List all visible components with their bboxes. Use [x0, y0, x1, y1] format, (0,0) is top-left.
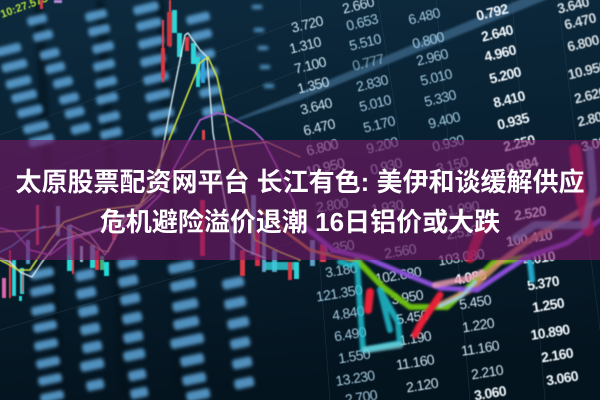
- table figures, bottom right: 1.930: [370, 196, 405, 217]
- table figures, bottom right: 100.410: [505, 226, 554, 250]
- table figures, bottom right: 1.350: [321, 236, 356, 257]
- table figures, top right: 1.310: [288, 33, 323, 57]
- table figures, top right: 2.830: [355, 71, 390, 95]
- table figures, top right: 0.984: [505, 153, 540, 177]
- table figures, top right: 0.935: [496, 109, 531, 133]
- table figures, bottom right: 1.090: [446, 197, 481, 218]
- table figures, bottom right: 2.210: [470, 361, 505, 382]
- table figures, top right: 2.640: [480, 21, 515, 45]
- title: 危机避险溢价退潮 16日铝价或大跌: [100, 207, 500, 237]
- table figures, top right: 5.200: [488, 63, 523, 87]
- table figures, bottom right: 1.220: [461, 314, 496, 335]
- table figures, bottom right: 4.080: [453, 266, 488, 287]
- table figures, bottom right: 1.190: [398, 327, 433, 348]
- table figures, bottom right: 4.840: [331, 302, 366, 323]
- table figures, bottom right: 1.550: [337, 345, 372, 366]
- table figures, top right: 7.100: [293, 53, 328, 77]
- top candlesticks: [161, 0, 205, 87]
- table figures, top right: 1.350: [296, 73, 331, 97]
- lower columns: [29, 267, 55, 280]
- line charts: white, yellow, purple, orange: [0, 33, 360, 277]
- table figures, top right: 6.470: [302, 115, 337, 139]
- table figures, top right: 3.640: [299, 94, 334, 118]
- table figures, top right: 5.170: [362, 112, 397, 136]
- table figures, top right: 0.653: [345, 10, 380, 34]
- table figures, top right: 6.480: [407, 4, 442, 28]
- table figures, top right: 0.930: [431, 131, 466, 155]
- table figures, top right: 5.510: [348, 30, 383, 54]
- table figures, top right: 3.150: [435, 153, 470, 177]
- table figures, bottom right: 1.250: [531, 294, 566, 315]
- table figures, top right: 0.777: [351, 50, 386, 74]
- table figures, bottom right: 102.680: [374, 263, 423, 287]
- table figures, top right: 9.400: [427, 108, 462, 132]
- table figures, top right: 2.250: [502, 131, 537, 155]
- table figures, bottom right: 10.890: [529, 321, 571, 343]
- table figures, bottom right: 121.350: [315, 281, 364, 305]
- table figures, bottom right: 2.120: [405, 374, 440, 395]
- table figures, top right: 5.330: [423, 86, 458, 110]
- table figures, bottom right: 13.230: [334, 367, 376, 389]
- table figures, top right: 10.950: [304, 154, 347, 180]
- table figures, bottom right: 2.560: [383, 240, 418, 261]
- table figures, bottom right: 5.450: [458, 291, 493, 312]
- table figures, bottom right: 4.010: [522, 247, 557, 268]
- table figures, bottom right: 103.080: [437, 245, 486, 269]
- table figures, bottom right: 6.490: [333, 323, 368, 344]
- table figures, bottom right: 5.450: [395, 306, 430, 327]
- table figures, top right: 9.200: [365, 133, 400, 157]
- table figures, top right: 5.010: [358, 91, 393, 115]
- table figures, bottom right: 2.520: [513, 202, 548, 223]
- title: [15, 167, 585, 237]
- table figures, bottom right: 11.160: [460, 337, 501, 359]
- table figures, top right: 6.800: [566, 31, 600, 55]
- table figures, top right: 0.792: [475, 0, 510, 24]
- table figures, top right: [288, 0, 600, 180]
- table figures, top right: 0.800: [411, 28, 446, 52]
- table figures, bottom right: 3.060: [545, 367, 580, 388]
- table figures, bottom right: 5.370: [526, 272, 561, 293]
- lower-left candlesticks: [2, 130, 326, 301]
- table figures, top right: 2.960: [415, 45, 450, 69]
- highlighted table row: [215, 0, 560, 128]
- table figures, top right: 4.960: [483, 41, 518, 65]
- table figures, bottom right: 3.180: [324, 259, 359, 280]
- blurred left columns of figures: [0, 1, 274, 400]
- table figures, bottom right: 2.160: [540, 344, 575, 365]
- table figures, top right: 6.800: [305, 135, 340, 159]
- table figures, top right: 3.720: [290, 12, 325, 36]
- table figures, bottom right: 3.950: [390, 286, 425, 307]
- table figures, bottom right: 11.160: [395, 351, 436, 373]
- translucent purple title band: [0, 140, 600, 260]
- table figures, top right: 6.470: [563, 9, 598, 33]
- table figures, top right: 8.410: [492, 87, 527, 111]
- table figures, top right: 5.010: [419, 65, 454, 89]
- table figures, bottom right: 2.800: [315, 194, 350, 215]
- table figures, bottom right: [315, 194, 580, 400]
- table figures, bottom right: 2.510: [445, 221, 480, 242]
- title: 太原股票配资网平台 长江有色: 美伊和谈缓解供应: [15, 167, 585, 197]
- table figures, top right: 0.930: [369, 154, 404, 178]
- thick chart lines on the right: [300, 150, 600, 350]
